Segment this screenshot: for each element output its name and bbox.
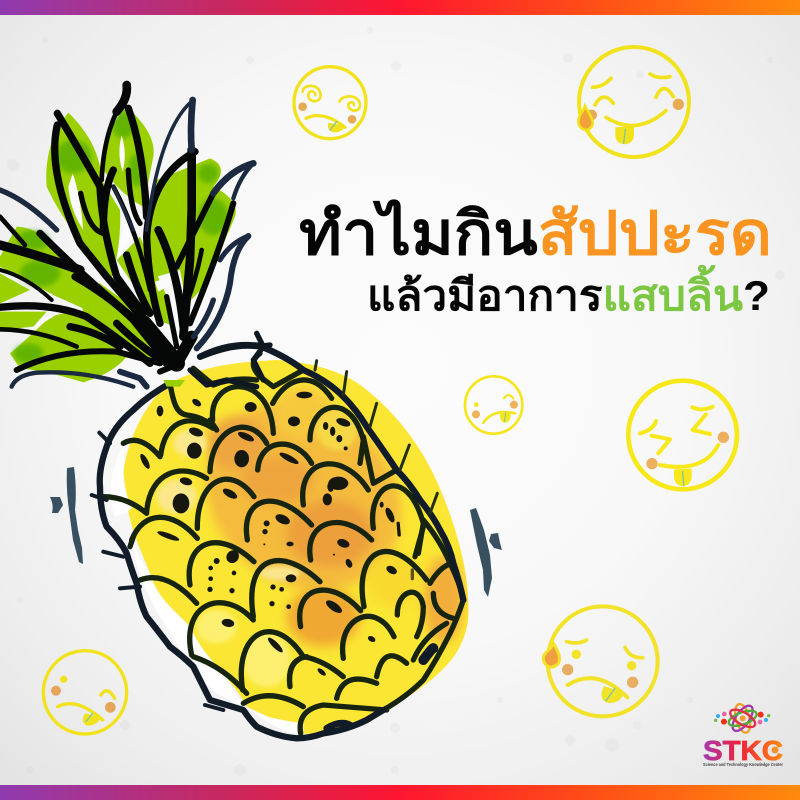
emoji: squinting [628, 381, 737, 489]
bottom gradient bar [0, 785, 800, 800]
logo wordmark: STKC [703, 735, 783, 766]
top gradient bar [0, 0, 800, 15]
right motion scribble [470, 508, 502, 597]
fruit watercolor flesh [111, 360, 468, 734]
left motion scribble [50, 467, 83, 564]
leaf ink strokes [0, 85, 233, 372]
pineapple leaves [0, 85, 270, 387]
STKC logo [703, 702, 783, 767]
scale outlines [103, 353, 463, 733]
leaf navy outlines [0, 100, 270, 387]
emoji: laughing with sweat top right [578, 47, 689, 157]
logo atom icon [714, 702, 770, 734]
emoji: small sad [465, 376, 522, 434]
emoji: dizzy small top [294, 67, 366, 139]
title line 1: ทำไมกิน สัปปะรด [299, 198, 772, 267]
leaf watercolor [0, 107, 236, 387]
title [299, 198, 772, 319]
outer outline [92, 345, 463, 738]
seed dots [138, 392, 414, 677]
logo tagline: Science and Technology Knowledge Center [703, 762, 783, 767]
emoji: sick with sweat [543, 606, 658, 716]
emoji: sad bottom left [43, 651, 127, 734]
title line 2: แล้วมีอาการ แสบลิ้น? [367, 264, 770, 319]
pineapple fruit [92, 345, 468, 738]
logo dot [772, 746, 778, 754]
